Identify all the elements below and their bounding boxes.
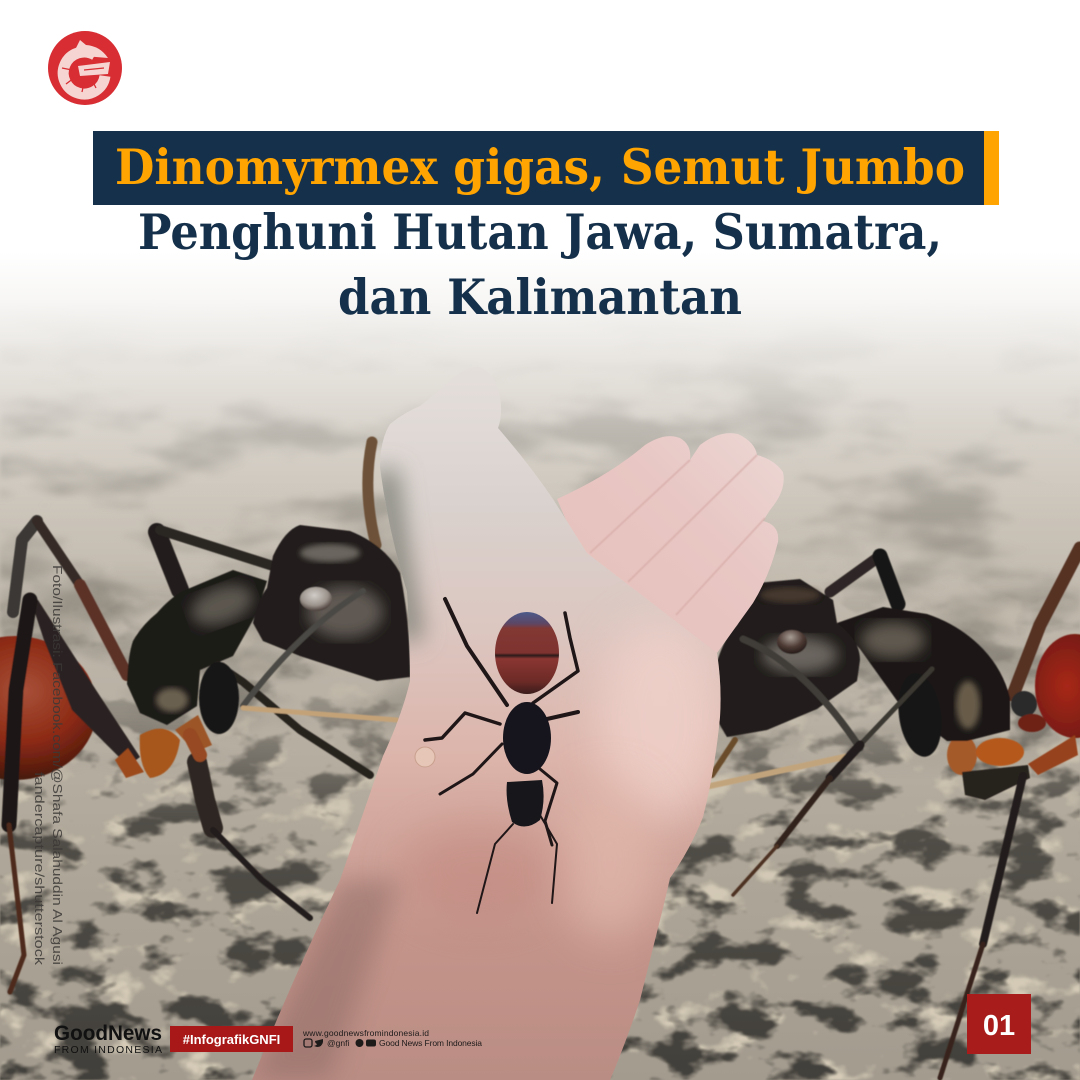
photo credit: Foto/Ilustrasi: Facebook.com/@Shafa Salahuddin Al Agusi (50, 565, 65, 965)
left ant: middle leg (190, 665, 370, 918)
right ant: red gaster (1035, 634, 1080, 738)
photo credit: fandercapture/shutterstock (32, 772, 47, 966)
right ant: thorax (837, 607, 1010, 741)
left ant: thorax (127, 570, 267, 725)
right ant: middle leg (733, 669, 932, 895)
title lines 2 and 3 (138, 203, 942, 326)
right ant: back legs (712, 548, 1080, 775)
footer brand: GoodNews From Indonesia: FROM INDONESIA (54, 1044, 162, 1056)
hashtag badge: #InfografikGNFI (183, 1032, 280, 1047)
logo: GNFI red circle emblem (48, 31, 122, 105)
small ant on the wrist (425, 599, 578, 913)
right ant: head (715, 579, 860, 737)
left ant: back legs (13, 442, 376, 675)
right ant: antenna (710, 639, 860, 786)
palm, wrist and arm (252, 367, 721, 1080)
footer website and social handles: Good News From Indonesia (379, 1038, 482, 1048)
head highlights (307, 586, 383, 638)
hand and forearm (252, 367, 784, 1080)
hashtag badge (170, 1026, 293, 1052)
fingers (557, 433, 784, 653)
right ant: mandibles and orange joints (947, 735, 977, 775)
right giant ant (710, 548, 1080, 1078)
title line 1: Dinomyrmex gigas, Semut Jumbo (115, 138, 965, 196)
title lines 2 and 3: dan Kalimantan (338, 268, 742, 326)
left ant: antenna (243, 591, 397, 720)
right ant: femur and tibia (962, 765, 1030, 800)
skin shading (252, 470, 722, 1080)
left ant: coxa (199, 662, 239, 734)
thorax highlights (186, 577, 258, 633)
footer website and social handles: @gnfi (327, 1038, 349, 1048)
footer website and social handles (302, 1028, 482, 1048)
small ant: thorax (503, 702, 551, 774)
small ant: gaster (495, 612, 559, 694)
blister (415, 747, 435, 767)
right ant: coxa (893, 670, 947, 760)
page number badge (967, 994, 1031, 1054)
left giant ant (0, 442, 410, 992)
left ant: head (253, 525, 410, 681)
title highlight bar (93, 131, 999, 205)
head highlights (762, 637, 838, 673)
footer brand: GoodNews From Indonesia (54, 1022, 162, 1056)
small ant: legs (425, 599, 578, 913)
page number badge: 01 (983, 1010, 1015, 1042)
finger creases (590, 455, 765, 615)
thorax highlights (861, 622, 925, 658)
left ant: near foreleg (30, 598, 140, 766)
footer brand: GoodNews From Indonesia: GoodNews (54, 1022, 162, 1045)
right ant: eye (777, 630, 807, 654)
right ant: petiole (1011, 691, 1037, 717)
background: rocky ground photo fading to white (0, 291, 1080, 1080)
left ant: red gaster (0, 636, 97, 780)
left ant: mandibles (140, 729, 180, 778)
footer website and social handles: www.goodnewsfromindonesia.id (302, 1028, 429, 1038)
title lines 2 and 3: Penghuni Hutan Jawa, Sumatra, (138, 203, 942, 261)
small ant: head (507, 780, 544, 827)
left ant: spiny foreleg tarsus (9, 600, 30, 992)
photo credit (32, 565, 65, 966)
left ant: eye (300, 587, 332, 611)
